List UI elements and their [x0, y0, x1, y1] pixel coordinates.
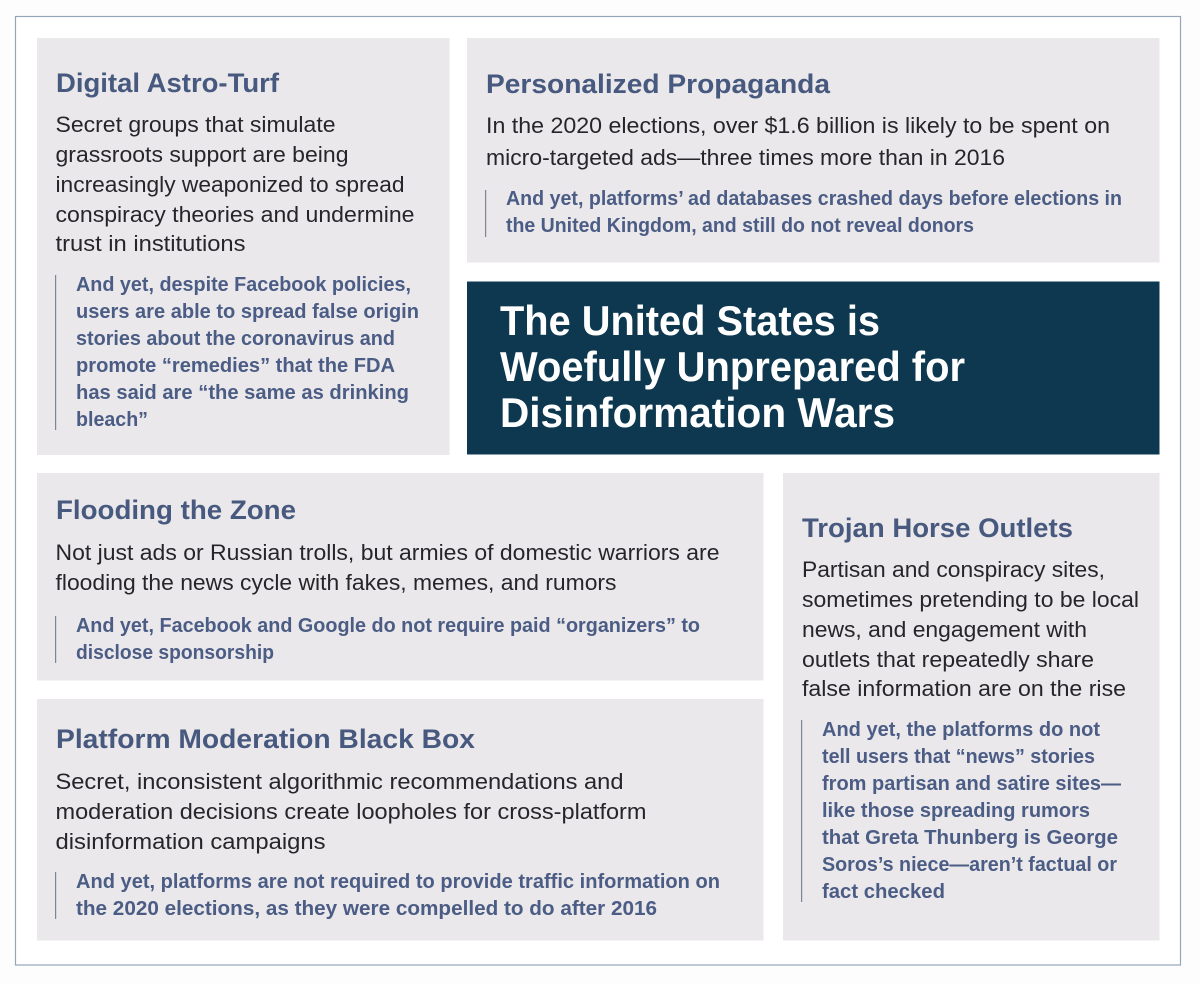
body text: Digital Astro-Turf: increasingly weaponized to spread [56, 172, 404, 197]
panel: Personalized Propaganda [467, 38, 1160, 262]
body text: Trojan Horse Outlets: outlets that repeatedly share [802, 647, 1094, 672]
title: The United States is [500, 297, 880, 344]
body text: Digital Astro-Turf [56, 112, 414, 256]
callout: Trojan Horse Outlets: tell users that “news” stories [822, 746, 1095, 768]
callout: Trojan Horse Outlets: that Greta Thunberg is George [822, 827, 1118, 849]
callout: Flooding the Zone: disclose sponsorship [76, 642, 274, 664]
callout: Personalized Propaganda: And yet, platforms’ ad databases crashed days before elections in [506, 188, 1122, 210]
body text: Digital Astro-Turf: trust in institutions [56, 231, 246, 256]
body text: Personalized Propaganda: micro-targeted ads—three times more than in 2016 [486, 145, 1005, 170]
body text: Personalized Propaganda: In the 2020 elections, over $1.6 billion is likely to be spent on [486, 113, 1110, 138]
body text: Flooding the Zone [56, 540, 720, 595]
callout: Digital Astro-Turf: promote “remedies” that the FDA [76, 355, 395, 377]
title: Woefully Unprepared for [500, 343, 965, 390]
panel: Flooding the Zone [37, 473, 764, 680]
body text: Platform Moderation Black Box [56, 769, 646, 854]
callout: Platform Moderation Black Box [55, 871, 720, 920]
body text: Flooding the Zone: Not just ads or Russian trolls, but armies of domestic warriors are [56, 540, 720, 565]
panel: Trojan Horse Outlets [783, 473, 1160, 940]
body text: Trojan Horse Outlets: Partisan and conspiracy sites, [802, 557, 1105, 582]
callout: Personalized Propaganda: the United Kingdom, and still do not reveal donors [506, 215, 974, 237]
body text: Trojan Horse Outlets: false information are on the rise [802, 676, 1126, 701]
heading: Platform Moderation Black Box: Platform Moderation Black Box [56, 724, 475, 754]
callout: Flooding the Zone: And yet, Facebook and Google do not require paid “organizers” to [76, 615, 700, 637]
body text: Platform Moderation Black Box: moderation decisions create loopholes for cross-platform [56, 799, 646, 824]
callout: Platform Moderation Black Box: And yet, platforms are not required to provide traffic information on [76, 871, 720, 893]
callout: Digital Astro-Turf: stories about the coronavirus and [76, 328, 395, 350]
body text: Digital Astro-Turf: conspiracy theories and undermine [56, 202, 414, 227]
callout: Digital Astro-Turf: users are able to spread false origin [76, 301, 419, 323]
body text: Digital Astro-Turf: grassroots support are being [56, 142, 348, 167]
callout: Trojan Horse Outlets: And yet, the platforms do not [822, 719, 1100, 741]
callout: Trojan Horse Outlets: Soros’s niece—aren’t factual or [822, 854, 1117, 876]
callout: Trojan Horse Outlets: fact checked [822, 881, 945, 903]
panel: Platform Moderation Black Box [37, 699, 764, 940]
title: Disinformation Wars [500, 389, 895, 436]
title [500, 297, 965, 436]
title panel [467, 282, 1160, 454]
body text: Personalized Propaganda [486, 113, 1110, 170]
heading: Digital Astro-Turf: Digital Astro-Turf [56, 68, 280, 98]
callout: Trojan Horse Outlets: from partisan and satire sites— [822, 773, 1121, 795]
heading: Personalized Propaganda: Personalized Propaganda [486, 69, 831, 99]
callout: Digital Astro-Turf: And yet, despite Facebook policies, [76, 274, 411, 296]
callout: Personalized Propaganda [485, 188, 1122, 237]
body text: Platform Moderation Black Box: disinformation campaigns [56, 829, 326, 854]
body text: Flooding the Zone: flooding the news cycle with fakes, memes, and rumors [56, 570, 616, 595]
body text: Trojan Horse Outlets [802, 557, 1139, 701]
callout: Digital Astro-Turf: has said are “the same as drinking [76, 382, 409, 404]
body text: Digital Astro-Turf: Secret groups that simulate [56, 112, 336, 137]
heading: Trojan Horse Outlets: Trojan Horse Outlets [802, 513, 1073, 543]
body text: Trojan Horse Outlets: news, and engagement with [802, 617, 1087, 642]
body text: Trojan Horse Outlets: sometimes pretending to be local [802, 587, 1139, 612]
callout: Trojan Horse Outlets: like those spreading rumors [822, 800, 1090, 822]
callout: Digital Astro-Turf: bleach” [76, 409, 148, 431]
panel: Digital Astro-Turf [37, 38, 450, 455]
callout: Platform Moderation Black Box: the 2020 elections, as they were compelled to do after 2016 [76, 898, 657, 920]
callout: Flooding the Zone [55, 615, 700, 664]
callout: Digital Astro-Turf [55, 274, 419, 431]
callout: Trojan Horse Outlets [801, 719, 1121, 903]
heading: Flooding the Zone: Flooding the Zone [56, 495, 296, 525]
body text: Platform Moderation Black Box: Secret, inconsistent algorithmic recommendations and [56, 769, 624, 794]
